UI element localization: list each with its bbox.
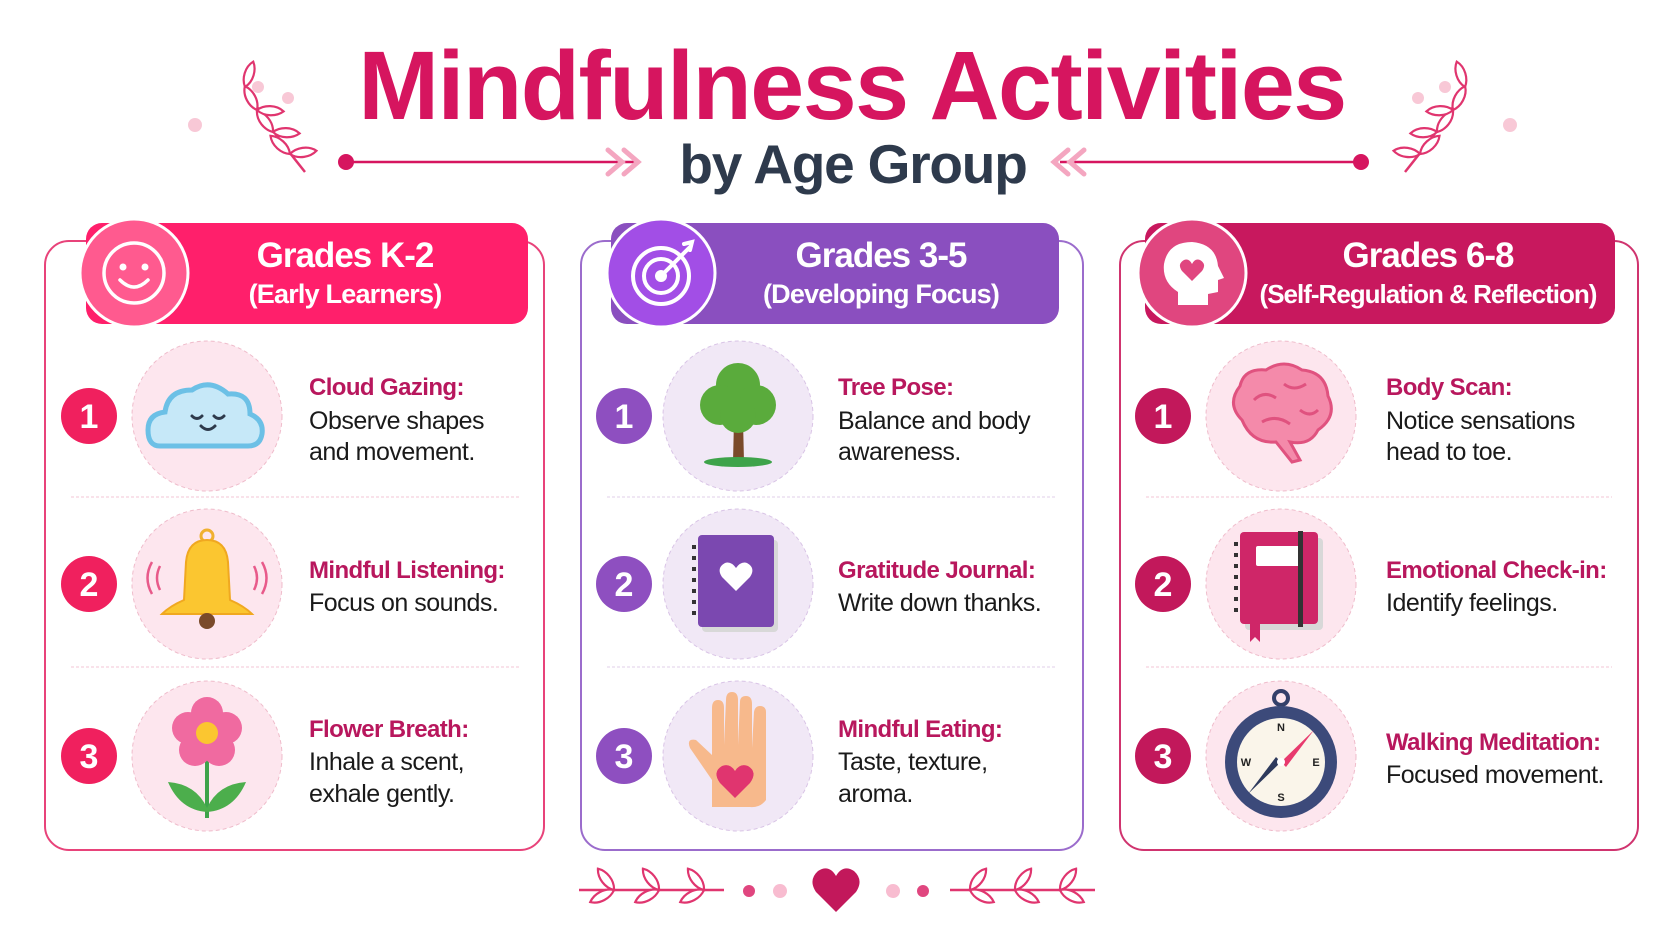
item: Body Scan: 1	[1154, 398, 1172, 436]
item: Emotional Check-in: Emotional Check-in:	[1386, 557, 1607, 584]
item: Walking Meditation: N	[1277, 722, 1285, 734]
item: Walking Meditation: S	[1277, 792, 1285, 804]
item: Flower Breath	[61, 681, 469, 831]
item: Mindful Eating: 3	[615, 738, 633, 776]
item: Body Scan	[1135, 341, 1575, 491]
header: Grades K-2	[80, 219, 528, 327]
bottom ornament	[579, 867, 1095, 912]
header: Grades 6-8: Grades 6-8	[1343, 236, 1514, 275]
item: Walking Meditation: Focused movement.	[1386, 761, 1604, 789]
item: Flower Breath: Inhale a scent,	[309, 748, 464, 776]
item: Body Scan: Notice sensations	[1386, 407, 1575, 435]
item: Mindful Eating: Taste, texture,	[838, 748, 988, 776]
header: Grades 3-5	[607, 219, 1059, 327]
item: Mindful Listening	[61, 509, 505, 659]
item: Gratitude Journal	[596, 509, 1041, 659]
title: Mindfulness Activities	[358, 31, 1346, 140]
panel: Grades K-2	[45, 219, 544, 850]
item: Cloud Gazing: Observe shapes	[309, 407, 484, 435]
title decoration left	[188, 61, 640, 174]
header: Grades 6-8: (Self-Regulation & Reflection)	[1260, 279, 1597, 309]
item: Body Scan: Body Scan:	[1386, 374, 1512, 401]
item: Mindful Eating: aroma.	[838, 780, 913, 808]
item: Walking Meditation	[1135, 681, 1604, 831]
item: Flower Breath: exhale gently.	[309, 780, 454, 808]
item: Gratitude Journal: Gratitude Journal:	[838, 557, 1035, 584]
item: Emotional Check-in	[1135, 509, 1607, 659]
item: Cloud Gazing: Cloud Gazing:	[309, 374, 464, 401]
item: Mindful Listening: Focus on sounds.	[309, 589, 498, 617]
item: Tree Pose: awareness.	[838, 438, 961, 466]
item: Emotional Check-in: Identify feelings.	[1386, 589, 1558, 617]
item: Walking Meditation: Walking Meditation:	[1386, 729, 1600, 756]
item: Cloud Gazing: and movement.	[309, 438, 475, 466]
item: Cloud Gazing: 1	[80, 398, 98, 436]
header: Grades 3-5: Grades 3-5	[796, 236, 967, 275]
panel: Grades 3-5	[581, 219, 1083, 850]
header: Grades 6-8	[1138, 219, 1615, 327]
header: Grades 3-5: (Developing Focus)	[763, 279, 999, 309]
item: Tree Pose	[596, 341, 1031, 491]
item: Walking Meditation: E	[1312, 757, 1320, 769]
item: Tree Pose: 1	[615, 398, 633, 436]
panel: Grades 6-8	[1120, 219, 1638, 850]
item: Flower Breath: 3	[80, 738, 98, 776]
subtitle: by Age Group	[679, 133, 1027, 195]
item: Gratitude Journal: 2	[615, 566, 633, 604]
header: Grades K-2: Grades K-2	[257, 236, 434, 275]
item: Mindful Listening: 2	[80, 566, 98, 604]
item: Tree Pose: Tree Pose:	[838, 374, 953, 401]
item: Cloud Gazing	[61, 341, 484, 491]
item: Tree Pose: Balance and body	[838, 407, 1031, 435]
item: Mindful Eating	[596, 681, 1002, 831]
header: Grades K-2: (Early Learners)	[249, 279, 441, 309]
title decoration right	[1054, 61, 1517, 174]
item: Walking Meditation: 3	[1154, 738, 1172, 776]
item: Walking Meditation: W	[1241, 757, 1252, 769]
item: Mindful Eating: Mindful Eating:	[838, 716, 1002, 743]
item: Mindful Listening: Mindful Listening:	[309, 557, 505, 584]
item: Flower Breath: Flower Breath:	[309, 716, 469, 743]
item: Gratitude Journal: Write down thanks.	[838, 589, 1041, 617]
item: Body Scan: head to toe.	[1386, 438, 1512, 466]
item: Emotional Check-in: 2	[1154, 566, 1172, 604]
